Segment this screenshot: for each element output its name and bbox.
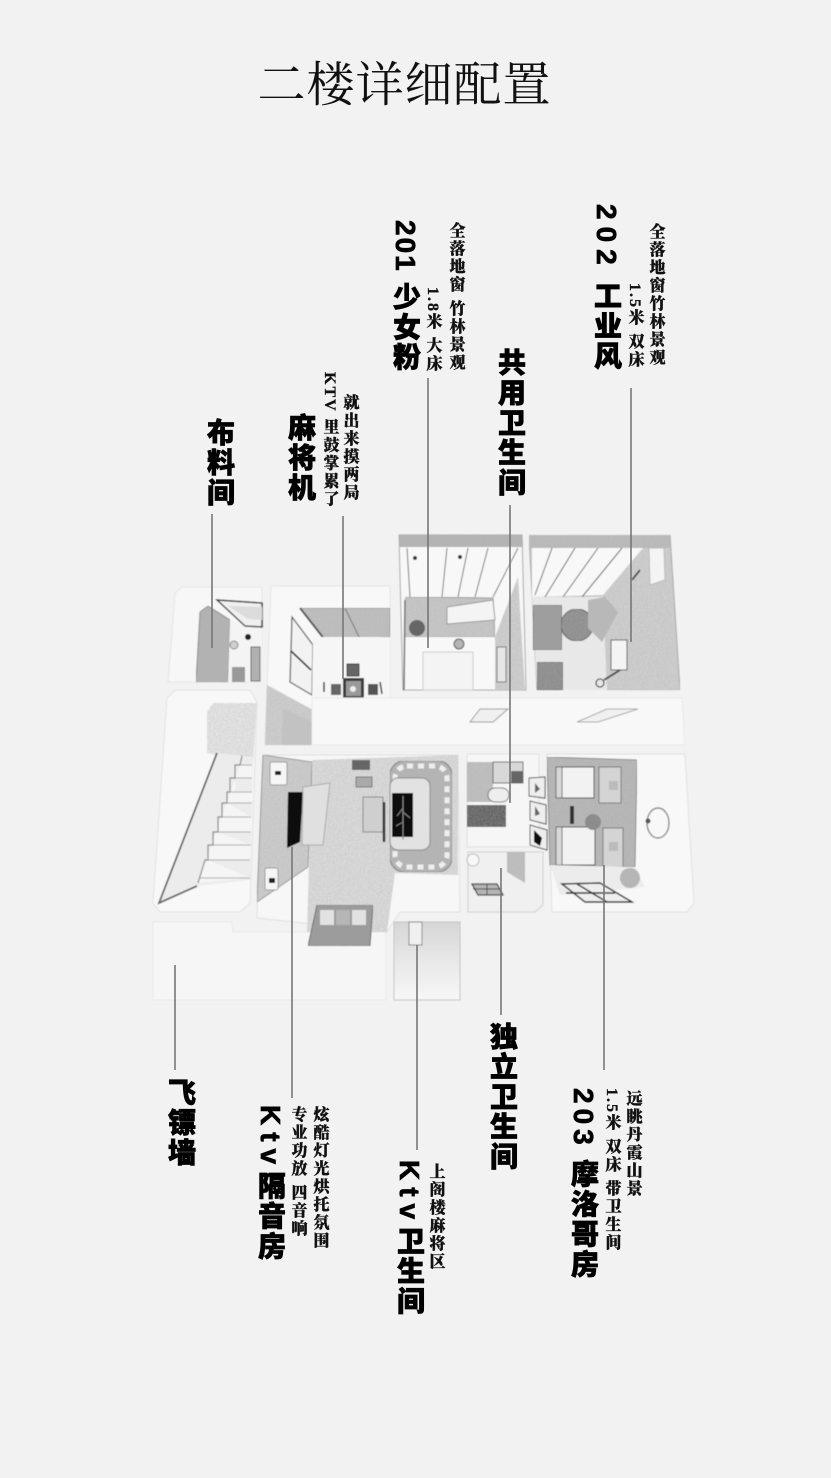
label: KTV toilet (394, 1160, 446, 1316)
label: room 203: 1.5米 双床 带卫生间 (603, 1088, 620, 1252)
feature screen (392, 793, 413, 840)
label: room 203: 203 摩洛哥房 (568, 1088, 599, 1280)
leader line: KTV toilet (416, 945, 418, 1150)
room: KTV (257, 755, 460, 946)
label: KTV soundproof room (255, 1105, 330, 1261)
leader line: fabric room (211, 514, 213, 648)
label: mahjong: 就出来摸两局 (341, 394, 358, 502)
label: private bathroom: 独立卫生间 (487, 1022, 518, 1172)
leader line: KTV room (291, 847, 293, 1098)
leader line: mahjong (342, 516, 344, 679)
room 202 (529, 535, 680, 690)
leader line: room 201 (427, 378, 429, 648)
label: mahjong: KTV 里鼓掌累了 (321, 372, 338, 508)
corridor rugs (470, 709, 638, 722)
carpet ring (390, 761, 452, 872)
label: KTV soundproof room: 炫酷灯光烘托氛围 (311, 1106, 328, 1250)
room: staircase (153, 690, 257, 912)
beds (556, 767, 623, 867)
room 203 (547, 754, 694, 912)
framed pictures (529, 777, 547, 850)
label: room 201: 201 少女粉 (390, 220, 421, 372)
label: KTV toilet: Ktv 卫生间 (394, 1160, 425, 1316)
wall screen (287, 792, 303, 848)
label: KTV soundproof room: Ktv 隔音房 (255, 1105, 286, 1261)
label: shared bathroom: 共用卫生间 (495, 348, 526, 498)
round rug (561, 609, 593, 641)
coffee table (363, 797, 383, 832)
label: room 202: 全落地窗竹林景观 (647, 223, 664, 367)
title: 二楼详细配置 (257, 59, 552, 112)
room: KTV toilet (394, 922, 460, 1000)
corridor (312, 698, 685, 745)
teddy bear (585, 814, 601, 830)
label: room 202: 202 工业风 (591, 204, 622, 372)
leader line: dart wall (174, 965, 176, 1070)
sofa (308, 905, 373, 946)
plant (409, 620, 425, 636)
label: room 201: 全落地窗 竹林景观 (447, 222, 464, 372)
room 201 (399, 535, 526, 690)
label: KTV toilet: 上阁楼麻将区 (427, 1163, 444, 1271)
speakers (270, 762, 287, 785)
bed (533, 605, 562, 650)
label: room 203 (568, 1088, 642, 1280)
bed (447, 600, 495, 624)
label: mahjong: 麻将机 (285, 413, 316, 503)
leader line: room 203 (603, 865, 605, 1070)
leader line: shared bathroom (509, 505, 511, 803)
label: room 202: 1.5米 双床 (626, 283, 643, 369)
label: room 203: 远眺丹霞山景 (624, 1090, 641, 1198)
label: fabric room: 布料间 (204, 418, 235, 508)
room: private bathroom (467, 852, 543, 912)
label: room 201 (390, 220, 466, 373)
leader line: private bathroom (500, 868, 502, 1015)
cabinet (302, 783, 330, 845)
label: room 202 (591, 204, 666, 372)
room: fabric storage (168, 587, 262, 682)
leader line: room 202 (630, 388, 632, 642)
round mirror (647, 808, 669, 838)
label: mahjong (285, 372, 360, 508)
dart wall area (153, 922, 386, 1000)
label: dart wall: 飞镖墙 (165, 1078, 196, 1168)
label: room 201: 1.8米 大床 (424, 287, 441, 373)
label: KTV soundproof room: 专业功放 四音响 (289, 1106, 306, 1238)
mahjong table (324, 664, 382, 718)
room: mahjong (265, 586, 390, 745)
window rug (562, 883, 632, 902)
room: shared bathroom (467, 754, 547, 850)
